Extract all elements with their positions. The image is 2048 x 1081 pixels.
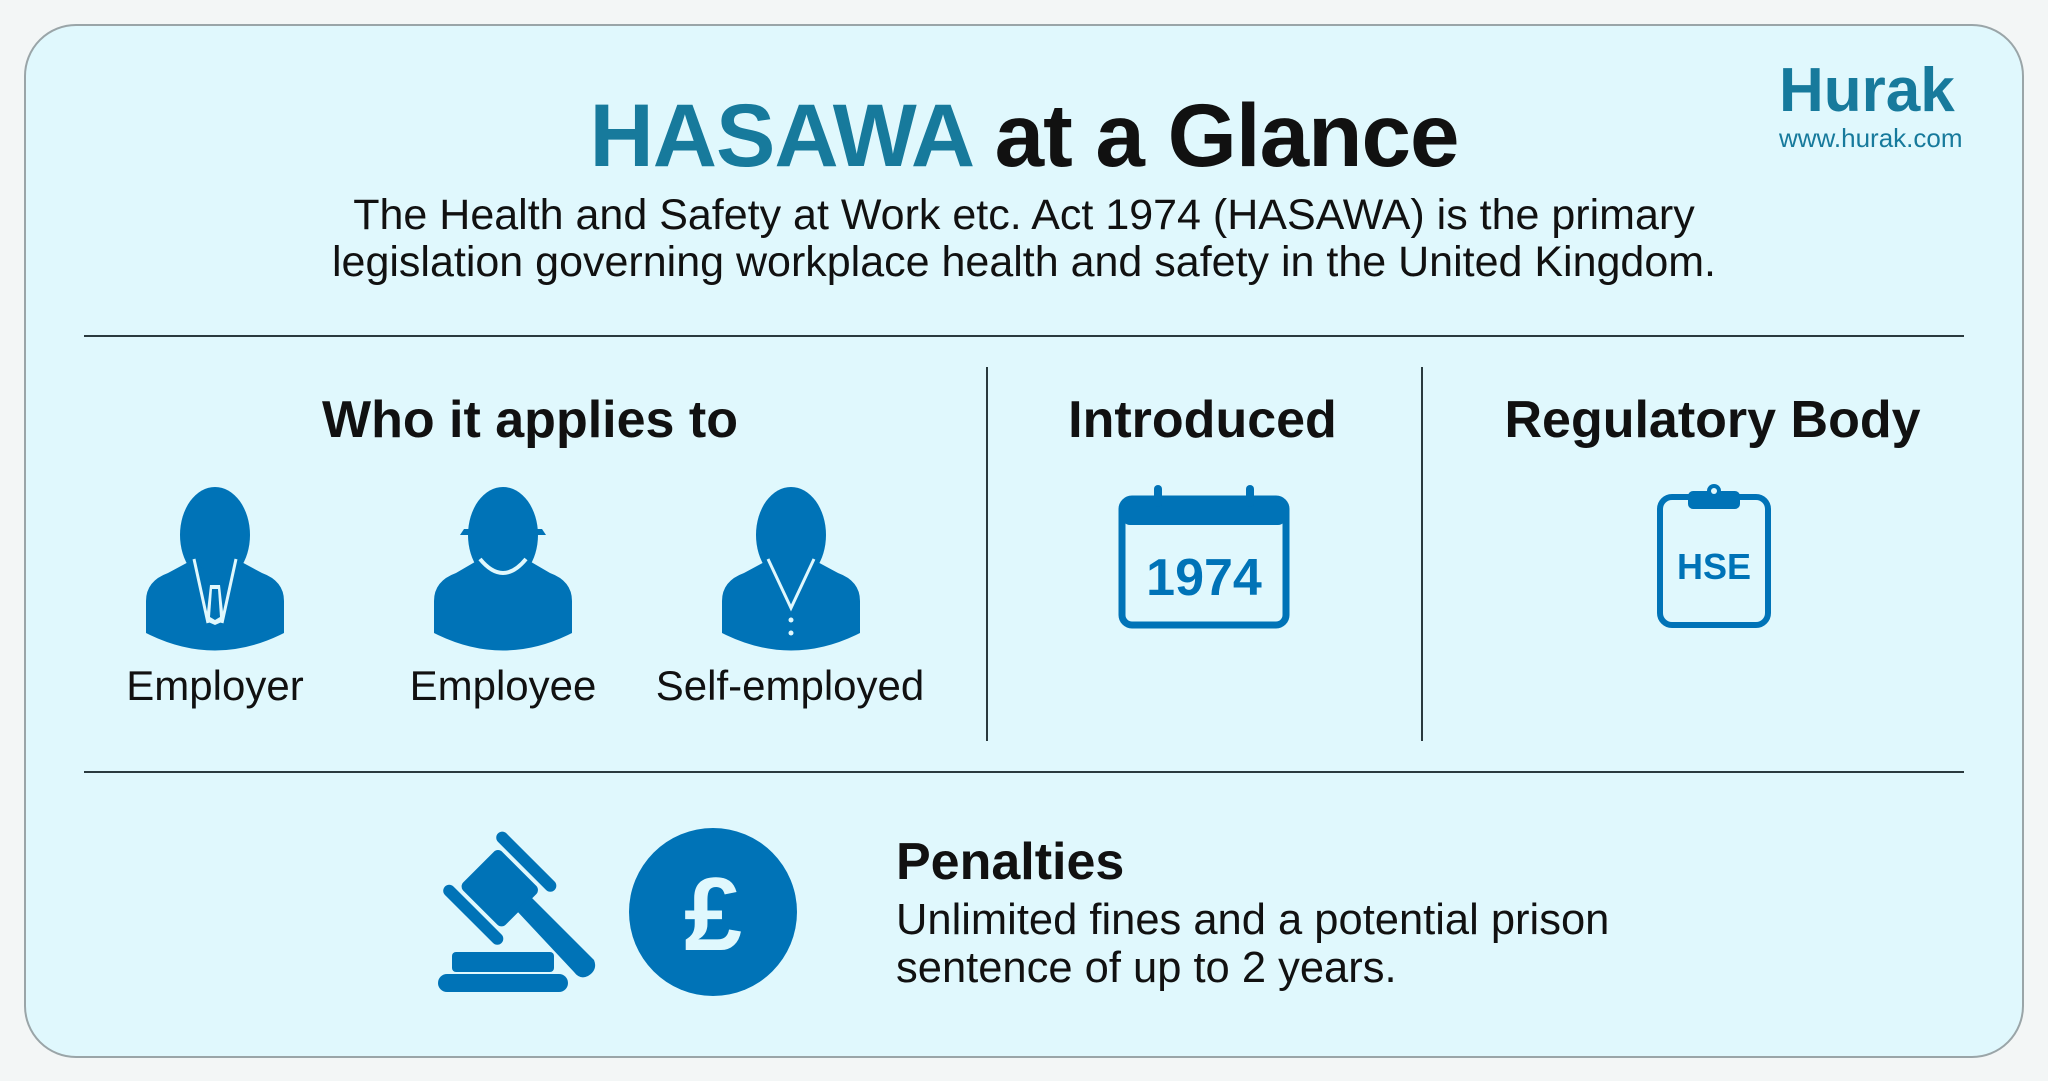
label: employer: Employer <box>126 662 304 709</box>
icon: clipboard HSE: HSE <box>1677 546 1751 587</box>
label: self-employed: Self-employed <box>656 662 924 709</box>
logo: Hurak <box>1779 56 1962 153</box>
icon: calendar 1974 <box>1118 485 1290 628</box>
heading: regulatory body: Regulatory Body <box>1504 391 1921 449</box>
icon: employer <box>146 487 284 650</box>
heading: penalties: Penalties <box>896 833 1124 891</box>
panel: penalties <box>438 828 1609 996</box>
text: penalties description: Unlimited fines and a potential prison <box>896 896 1609 944</box>
subtitle: The Health and Safety at Work etc. Act 1974 (HASAWA) is the primary <box>353 191 1695 239</box>
logo: Hurak: Hurak <box>1779 56 1955 125</box>
panel: regulatory body <box>1504 391 1921 628</box>
icon: self-employed <box>722 487 860 650</box>
logo: Hurak: www.hurak.com <box>1779 123 1962 153</box>
title: HASAWA at a Glance <box>590 85 1458 185</box>
panel: introduced <box>1068 391 1337 628</box>
text: penalties description: sentence of up to 2 years. <box>896 944 1397 992</box>
panel: who it applies to <box>126 391 924 709</box>
icon: pound coin <box>629 828 797 996</box>
text: penalties description <box>896 896 1609 992</box>
heading: introduced: Introduced <box>1068 391 1337 449</box>
icon: gavel <box>438 832 596 992</box>
icon: employee <box>434 487 572 650</box>
icon: clipboard HSE <box>1657 484 1771 628</box>
icon: calendar 1974: 1974 <box>1146 549 1262 607</box>
subtitle: legislation governing workplace health and safety in the United Kingdom. <box>332 238 1716 286</box>
subtitle <box>332 191 1716 286</box>
icon: pound coin: £ <box>684 857 742 973</box>
label: employee: Employee <box>410 662 596 709</box>
heading: who it applies to: Who it applies to <box>322 391 738 449</box>
